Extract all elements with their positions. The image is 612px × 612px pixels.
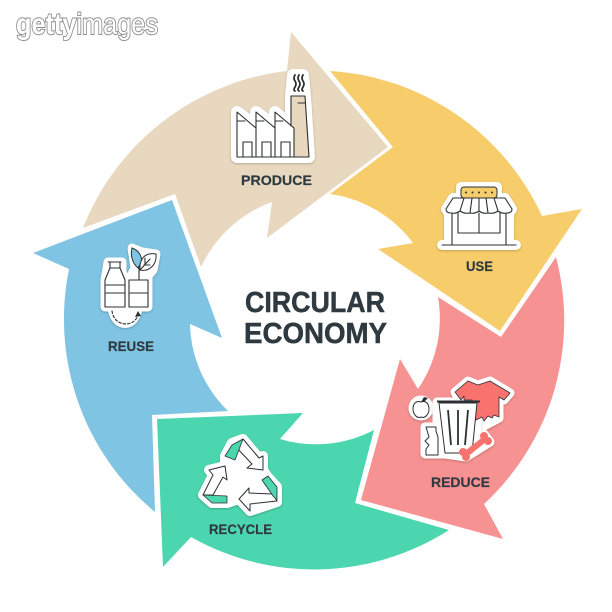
watermark: gettyimages: gettyimages [16, 8, 158, 41]
icon: waste [411, 381, 510, 460]
arrow: produce [83, 32, 388, 267]
panel: reuse [33, 200, 228, 512]
panel: recycle [157, 413, 449, 569]
label: reuse: REUSE [108, 338, 154, 354]
panel: use [330, 71, 582, 331]
label: produce: PRODUCE [241, 172, 312, 188]
title [244, 287, 387, 350]
title: ECONOMY [244, 318, 387, 350]
icon: factory [237, 75, 309, 157]
arrow: reuse [33, 200, 228, 512]
arrow: use [330, 71, 582, 331]
icon: bottle and jar [105, 248, 156, 324]
arrow: reduce [361, 257, 564, 539]
icon: shop [442, 187, 516, 245]
arrow: recycle [157, 413, 449, 569]
label: reduce: REDUCE [431, 474, 490, 490]
label: use: USE [466, 258, 493, 274]
panel: reduce [361, 257, 564, 539]
label: recycle: RECYCLE [209, 521, 272, 537]
panel: produce [83, 32, 388, 267]
title: CIRCULAR [245, 287, 385, 319]
icon: recycle symbol [203, 439, 277, 511]
